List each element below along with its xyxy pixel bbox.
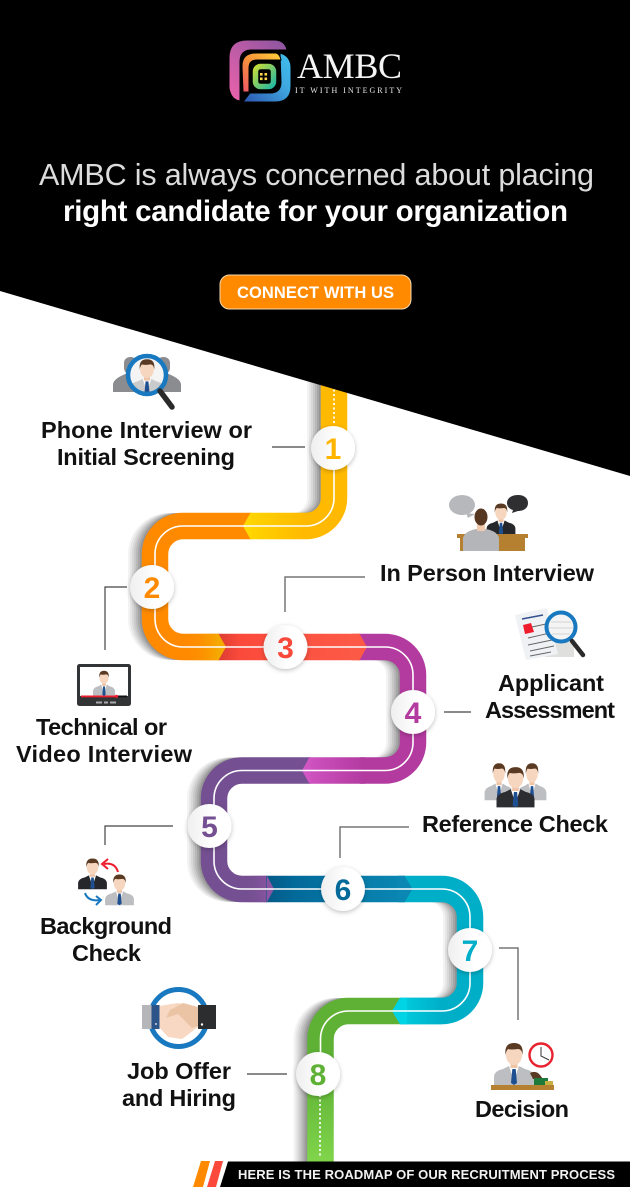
footer stripe red: [207, 1161, 223, 1187]
road segment: orange: [155, 526, 252, 647]
headline line 1: AMBC is always concerned about placing: [39, 158, 594, 192]
road segment: teal: [398, 876, 470, 1011]
label: job offer and hiring: [122, 1058, 236, 1111]
label: in person interview: In Person Interview: [380, 560, 595, 586]
road centre line: [155, 385, 470, 1158]
step 6 marker: [321, 867, 365, 911]
icon: in person interview: [449, 495, 528, 551]
step 6 marker: 6: [335, 874, 351, 907]
label: job offer and hiring: and Hiring: [122, 1085, 236, 1111]
label: applicant assessment: Assessment: [485, 697, 615, 723]
icon: phone interview magnifier: [113, 356, 181, 407]
label: job offer and hiring: Job Offer: [127, 1058, 231, 1084]
label: decision: Decision: [475, 1096, 569, 1122]
step 6 connector: [340, 827, 409, 858]
footer banner: [193, 1161, 630, 1187]
step 1 marker: 1: [325, 433, 341, 466]
label: phone interview: Phone Interview or: [41, 417, 252, 443]
step 2 connector: [105, 587, 127, 650]
step 7 marker: [448, 928, 492, 972]
step 3 marker: 3: [277, 632, 294, 665]
label: phone interview: Initial Screening: [57, 444, 235, 470]
logo tagline: IT WITH INTEGRITY: [295, 86, 402, 95]
step 8 connector: [247, 1073, 287, 1075]
label: reference check: Reference Check: [422, 811, 609, 837]
road segment: green: [320, 998, 407, 1162]
step 4 marker: 4: [405, 697, 422, 730]
icon: video player: [77, 664, 131, 706]
step 2 marker: [130, 565, 174, 609]
road segment: dark purple: [214, 770, 311, 889]
icon: decision maker: [491, 1043, 554, 1090]
label: background check: [40, 913, 172, 966]
icon: applicant assessment: [515, 608, 583, 660]
step 7 connector: [499, 948, 518, 1020]
label: technical or video interview: Technical or: [36, 714, 167, 740]
step 4 connector: [444, 711, 471, 713]
step 8 marker: [296, 1052, 340, 1096]
logo: [229, 40, 402, 102]
icon: background check people: [78, 859, 134, 905]
label: phone interview: [41, 417, 252, 470]
footer text: HERE IS THE ROADMAP OF OUR RECRUITMENT PROCESS: [238, 1167, 615, 1182]
step 7 marker: 7: [462, 935, 478, 968]
road segment: yellow: [243, 380, 334, 539]
label: applicant assessment: [485, 670, 615, 723]
black header background: [0, 0, 630, 476]
footer bar: [220, 1162, 630, 1187]
label: technical or video interview: Video Interview: [16, 741, 193, 767]
road segment: red: [218, 634, 360, 660]
step 1 marker: [311, 426, 355, 470]
step 3 marker: [264, 625, 308, 669]
road segment: magenta: [302, 634, 413, 784]
headline: [39, 158, 594, 228]
headline line 2: right candidate for your organization: [63, 195, 568, 228]
button: connect with us: [220, 275, 411, 309]
step 8 marker: 8: [310, 1059, 326, 1092]
footer stripe orange: [193, 1161, 210, 1187]
step 1 connector: [272, 446, 305, 448]
step 5 connector: [105, 826, 173, 845]
label: background check: Background: [40, 913, 172, 939]
label: technical or video interview: [16, 714, 193, 767]
step 5 marker: [188, 804, 232, 848]
step 3 connector: [285, 577, 365, 612]
label: applicant assessment: Applicant: [498, 670, 604, 696]
icon: reference check team: [485, 763, 546, 807]
road segment: blue: [266, 876, 405, 902]
logo mark: [229, 40, 291, 102]
step 2 marker: 2: [144, 572, 160, 605]
road shadow: [141, 380, 468, 1162]
step 4 marker: [391, 690, 435, 734]
label: background check: Check: [72, 940, 142, 966]
button: connect with us: CONNECT WITH US: [237, 284, 394, 302]
step 5 marker: 5: [201, 811, 218, 844]
icon: handshake: [142, 990, 216, 1046]
winding road: [155, 380, 470, 1162]
logo wordmark: AMBC: [297, 46, 402, 86]
